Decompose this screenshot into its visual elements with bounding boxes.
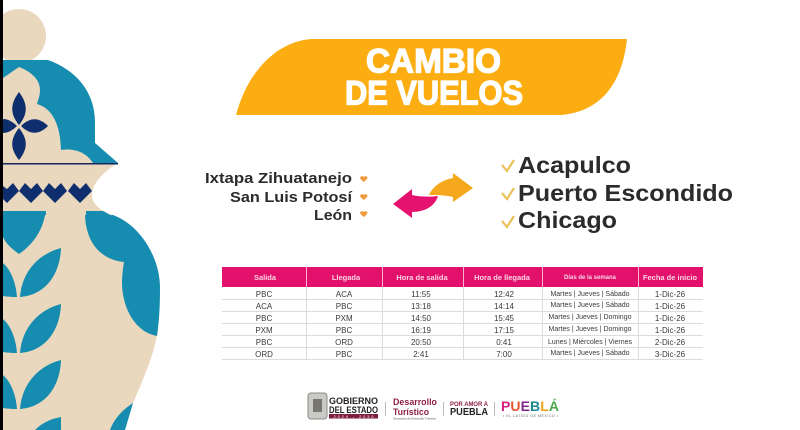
- table rows: ORD: [255, 350, 273, 359]
- table rows: PBC: [336, 326, 352, 335]
- icon: small hearts: [360, 176, 368, 217]
- table header: [222, 267, 703, 287]
- table rows: Martes | Jueves | Sábado: [550, 302, 630, 309]
- table rows: 13:18: [411, 302, 432, 311]
- logo: Por Amor a Puebla: [450, 401, 488, 418]
- destination names: Acapulco: [518, 152, 631, 178]
- table rows: Martes | Jueves | Sábado: [550, 291, 630, 298]
- table rows: Martes | Jueves | Domingo: [548, 326, 632, 333]
- table rows: PBC: [336, 302, 352, 311]
- logo: Gobierno del Estado: 2024 - 2030: [334, 414, 374, 419]
- logo: Desarrollo Turístico: [393, 397, 437, 420]
- table rows: 2-Dic-26: [655, 338, 686, 347]
- table rows: Martes | Jueves | Domingo: [548, 314, 632, 321]
- logo: Por Amor a Puebla: POR AMOR A: [450, 401, 488, 408]
- logo: Gobierno del Estado: DEL ESTADO: [329, 405, 378, 416]
- origin cities list: León: [314, 207, 352, 224]
- table rows: ACA: [336, 290, 353, 299]
- table header: Llegada: [332, 273, 361, 282]
- table rows: 11:55: [411, 290, 431, 299]
- logo: Desarrollo Turístico: Desarrollo: [393, 397, 437, 408]
- origin cities list: [205, 170, 353, 224]
- destination names: Chicago: [518, 207, 617, 233]
- decorative vase illustration: [0, 0, 160, 430]
- table header: Días de la semana: [564, 275, 617, 281]
- table rows: PXM: [255, 326, 273, 335]
- table rows: 2:41: [413, 350, 429, 359]
- table rows: 14:14: [494, 302, 515, 311]
- table rows: 1-Dic-26: [655, 326, 686, 335]
- origin cities list: San Luis Potosí: [230, 189, 353, 206]
- table header: Fecha de inicio: [643, 273, 698, 282]
- flight schedule table: [222, 267, 703, 360]
- table rows: 14:50: [411, 314, 432, 323]
- table rows: PBC: [256, 338, 272, 347]
- table rows: PXM: [335, 314, 353, 323]
- table rows: 20:50: [411, 338, 432, 347]
- destination names: [518, 152, 733, 233]
- table rows: 12:42: [494, 290, 515, 299]
- title text: [345, 42, 523, 112]
- table header: Salida: [254, 273, 277, 282]
- table rows: PBC: [256, 290, 272, 299]
- logo: Gobierno del Estado: GOBIERNO: [329, 396, 378, 407]
- destination names: Puerto Escondido: [518, 180, 733, 206]
- table rows: 1-Dic-26: [655, 302, 686, 311]
- title text: CAMBIO: [366, 42, 501, 80]
- title text: DE VUELOS: [345, 74, 523, 112]
- table rows: 1-Dic-26: [655, 314, 686, 323]
- exchange arrows: [393, 173, 473, 218]
- table rows: 0:41: [496, 338, 512, 347]
- icon: check marks: [502, 160, 514, 227]
- table rows: PBC: [256, 314, 272, 323]
- logo: Gobierno del Estado: [308, 393, 378, 419]
- table rows: 16:19: [411, 326, 432, 335]
- table rows: ACA: [256, 302, 273, 311]
- destination cities list: [502, 152, 733, 233]
- logo: Por Amor a Puebla: PUEBLA: [450, 407, 488, 418]
- icon: navy flower: [3, 92, 48, 160]
- table rows: 17:15: [494, 326, 515, 335]
- table rows: 3-Dic-26: [655, 350, 686, 359]
- table rows: Martes | Jueves | Sábado: [550, 350, 630, 357]
- table rows: 7:00: [496, 350, 512, 359]
- footer logos: [308, 393, 559, 420]
- logo: Desarrollo Turístico: Turístico: [393, 407, 429, 418]
- table rows: 15:45: [494, 314, 515, 323]
- logo: Puebla el latido de México: • EL LATIDO DE MÉXICO •: [503, 413, 559, 418]
- zigzag hearts band: [3, 183, 92, 203]
- logo: Desarrollo Turístico: Secretaría de Desarrollo Turístico: [393, 416, 436, 420]
- origin cities list: Ixtapa Zihuatanejo: [205, 170, 352, 187]
- title banner: [236, 39, 627, 115]
- table rows: 1-Dic-26: [655, 290, 686, 299]
- table header: Hora de salida: [396, 273, 448, 282]
- table rows: ORD: [335, 338, 353, 347]
- table header: Hora de llegada: [474, 273, 531, 282]
- table rows: [255, 290, 686, 359]
- logo: Puebla el latido de México: PUEBLÁ: [501, 398, 559, 414]
- table rows: Lunes | Miércoles | Viernes: [548, 339, 633, 346]
- table rows: PBC: [336, 350, 352, 359]
